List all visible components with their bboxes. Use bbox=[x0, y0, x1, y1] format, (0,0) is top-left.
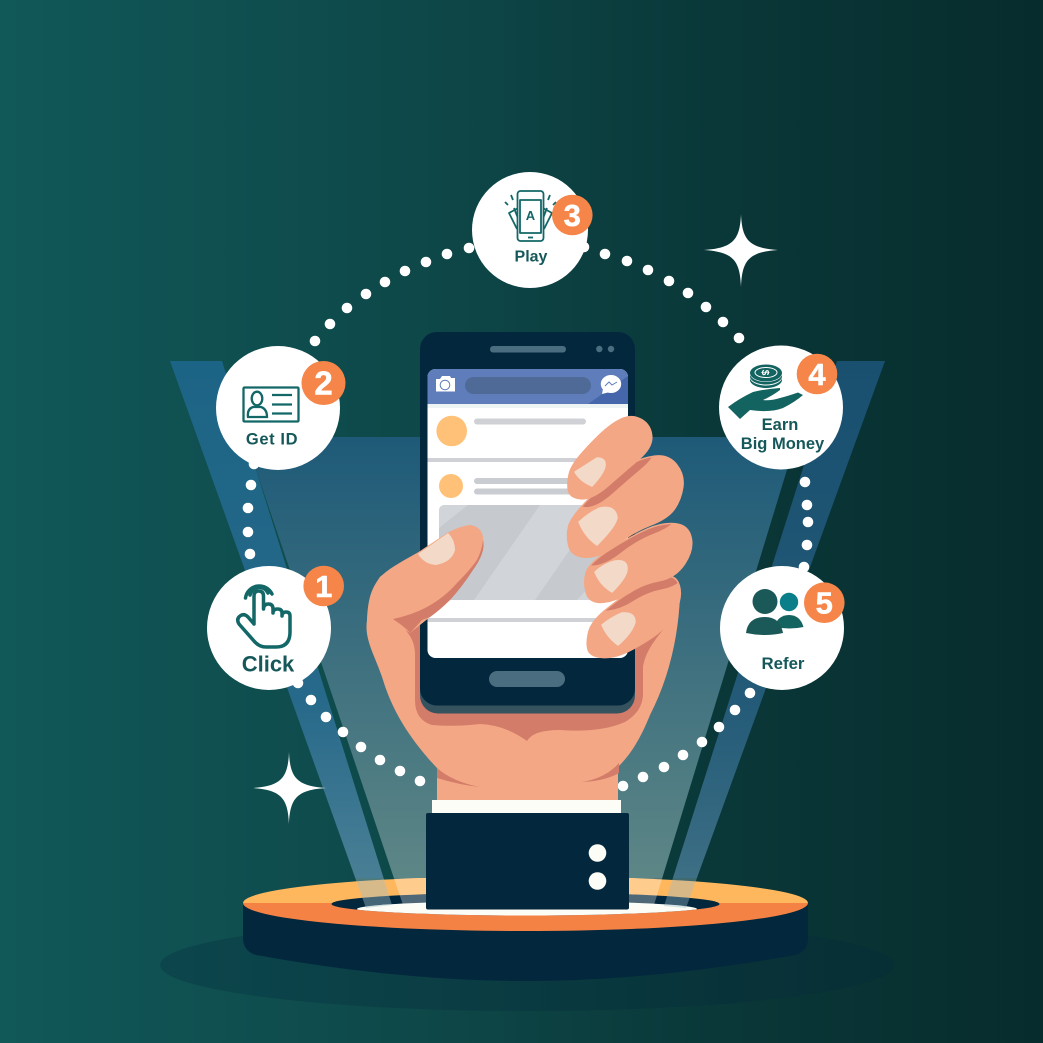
sparkle: right bbox=[704, 214, 778, 287]
badge 3: 3 bbox=[564, 198, 581, 233]
ring finger bbox=[584, 522, 693, 604]
platform bbox=[243, 876, 808, 981]
thumb nail bbox=[418, 533, 455, 565]
phone sensors bbox=[596, 346, 614, 352]
badge 5: 5 bbox=[816, 586, 833, 620]
badge 2: 2 bbox=[314, 364, 333, 402]
step 3: play bbox=[472, 172, 593, 288]
lower divider bbox=[428, 618, 596, 622]
icon: pointing hand bbox=[238, 586, 290, 647]
floor shadow bbox=[160, 919, 894, 1011]
thumb bbox=[367, 525, 484, 633]
step 4: earn big money bbox=[719, 346, 843, 470]
middle finger bbox=[566, 455, 684, 558]
phone speaker bbox=[490, 346, 566, 352]
index finger bbox=[569, 417, 651, 498]
jacket sleeve bbox=[426, 813, 629, 910]
app header bar bbox=[428, 369, 628, 408]
shirt cuff bbox=[432, 800, 621, 814]
step 2: get id bbox=[216, 346, 346, 470]
light beam: left bbox=[170, 361, 392, 908]
icon: hand holding coins: $ bbox=[759, 370, 770, 376]
post image bbox=[439, 505, 614, 600]
messenger icon bbox=[601, 375, 621, 394]
badge 4: 4 bbox=[808, 357, 826, 392]
label: Play bbox=[515, 248, 548, 266]
phone bbox=[420, 332, 635, 714]
label: Get ID bbox=[246, 430, 298, 448]
icon: phone with cards: A bbox=[526, 208, 536, 223]
little finger bbox=[586, 576, 682, 658]
step 1: click bbox=[207, 566, 344, 690]
light beam: centre bbox=[245, 437, 797, 905]
label: Big Money bbox=[741, 435, 825, 453]
dotted path connecting the steps bbox=[243, 242, 813, 791]
phone screen bbox=[428, 369, 628, 658]
phone home button bbox=[489, 671, 565, 687]
post two bbox=[439, 474, 570, 498]
label bbox=[741, 416, 825, 453]
fingers bbox=[568, 417, 695, 657]
label: Refer bbox=[762, 654, 805, 673]
badge 1: 1 bbox=[315, 569, 332, 604]
icon: id card bbox=[244, 388, 298, 422]
hand palm and wrist bbox=[366, 540, 680, 801]
sparkle: left bbox=[253, 752, 326, 824]
camera icon bbox=[436, 376, 455, 392]
icon: two people bbox=[746, 589, 804, 635]
step 5: refer bbox=[720, 566, 845, 690]
label: Click bbox=[242, 652, 295, 676]
post one bbox=[428, 416, 586, 462]
light beam: right bbox=[664, 361, 885, 908]
label: Earn bbox=[762, 416, 798, 434]
